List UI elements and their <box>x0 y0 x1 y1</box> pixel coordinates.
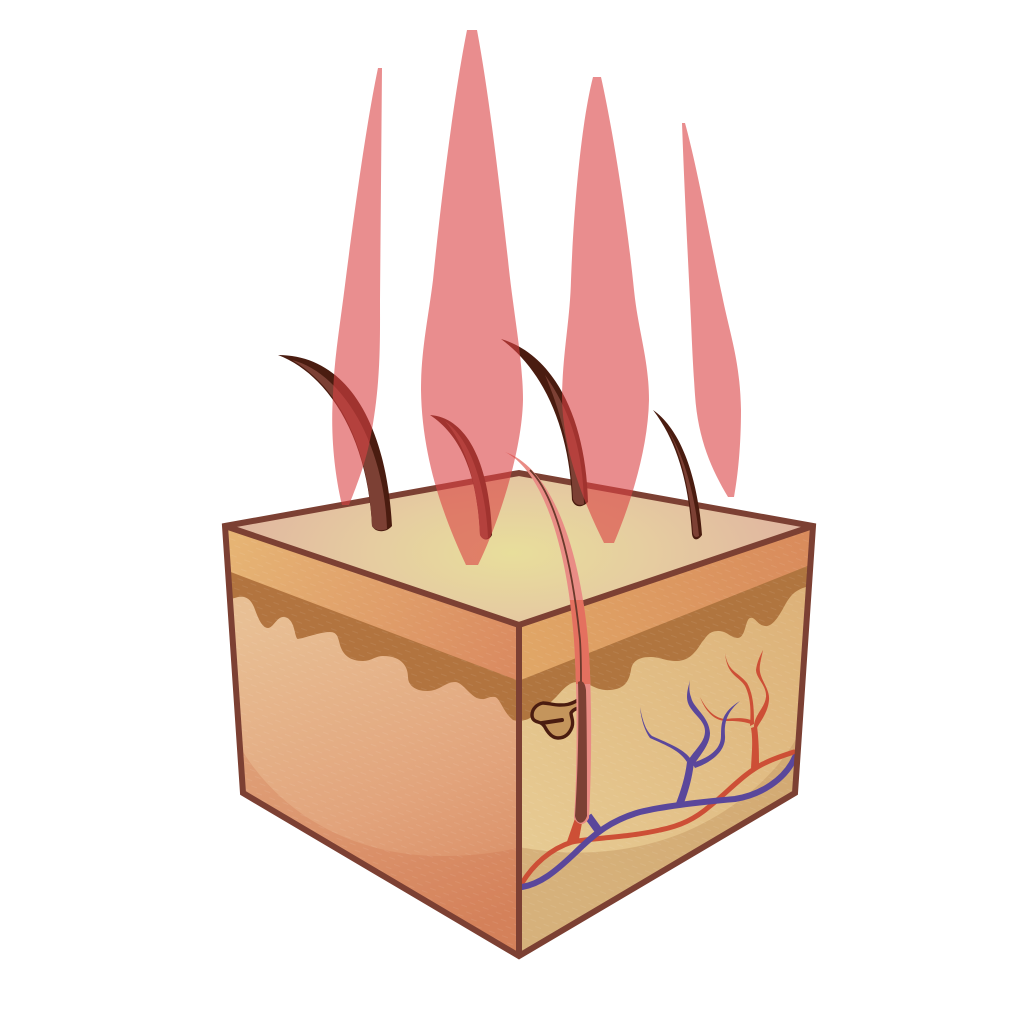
lower left tissue shading <box>244 753 516 950</box>
hair four <box>653 410 702 539</box>
left epidermis top layer <box>225 526 519 682</box>
sheath over epidermis <box>570 600 590 684</box>
top surface of skin <box>225 473 813 625</box>
gland body <box>532 700 578 738</box>
right face of skin block <box>515 520 815 960</box>
heat flames <box>332 30 741 565</box>
flame one <box>332 68 382 505</box>
cube outline <box>225 473 813 956</box>
hair shaft lower <box>575 681 587 823</box>
blue capillary branches <box>640 680 740 806</box>
blue follicle vessel <box>588 816 601 834</box>
sweat gland <box>532 700 578 738</box>
main blue vessel <box>522 757 795 887</box>
hair one <box>278 355 392 531</box>
red follicle vessel <box>567 820 582 843</box>
hair two <box>430 415 492 540</box>
flame four <box>682 123 741 497</box>
gland duct <box>542 720 562 723</box>
right epidermis top layer <box>519 526 813 682</box>
right face texture <box>515 520 815 960</box>
follicle sheath <box>505 452 591 824</box>
lower right tissue shading <box>522 740 796 950</box>
main red vessel <box>522 752 794 883</box>
right wavy dark skin layer <box>516 565 810 721</box>
hair three <box>501 339 588 506</box>
hair shaft upper <box>530 470 581 682</box>
left face of skin block <box>220 520 525 960</box>
left wavy dark skin layer <box>228 571 522 722</box>
long hair with follicle <box>505 452 591 824</box>
flame two <box>421 30 523 565</box>
red capillary branches <box>700 650 769 768</box>
skin cross-section illustration <box>222 30 816 960</box>
flame three <box>562 77 649 543</box>
left face texture <box>228 532 516 945</box>
hairs on surface <box>278 339 702 540</box>
blood vessels <box>522 650 795 887</box>
